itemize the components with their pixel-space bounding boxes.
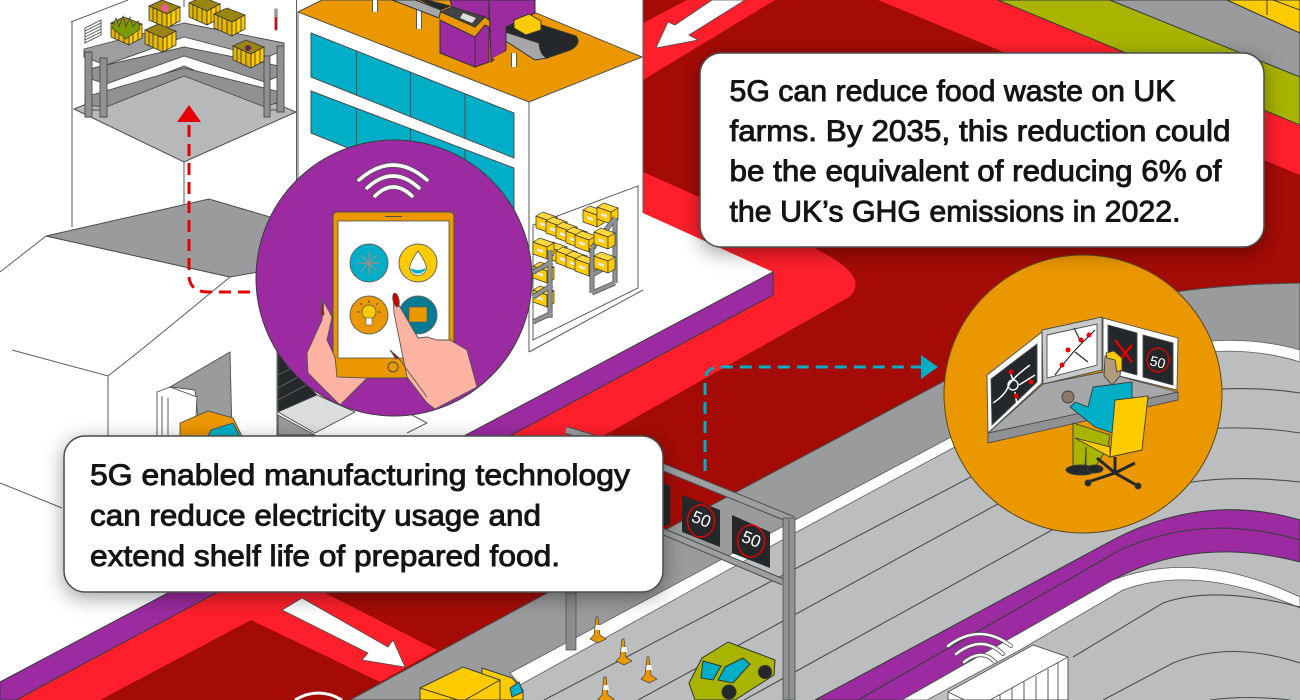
truck: white trailer with 5G signal <box>948 634 1068 700</box>
callout: farm food waste: be the equivalent of reducing 6% of <box>730 155 1222 188</box>
icon: wifi on trailer <box>948 634 1011 662</box>
windows: top row <box>311 33 514 158</box>
motorway: lower white strip <box>902 567 1300 700</box>
callout: manufacturing technology <box>64 436 663 592</box>
sign: speed limit 50 left <box>682 495 720 547</box>
road band: bright red top left with arrow <box>643 0 775 80</box>
icon: light bulb <box>350 296 388 334</box>
sign: speed limit 50 right: 50 <box>739 527 764 552</box>
callout: farm food waste: farms. By 2035, this reduction could <box>730 115 1230 148</box>
icon: parcel <box>399 296 437 334</box>
connector: red dashed arrow <box>177 105 258 292</box>
machinery: main building <box>298 0 642 158</box>
circle: orange traffic control room <box>944 255 1222 533</box>
cold room: floor <box>74 66 296 162</box>
truck: yellow lorry <box>420 667 523 700</box>
hands holding tablet <box>307 293 477 409</box>
circle: purple tablet app <box>256 140 532 416</box>
cold room: vent <box>85 20 101 43</box>
motorway: light carriageway <box>490 350 1300 700</box>
callout: manufacturing technology: extend shelf life of prepared food. <box>90 540 560 573</box>
platform: white factory ground <box>0 0 773 682</box>
motorway: white edge strip <box>510 340 1300 685</box>
sign: speed limit 50 left: 50 <box>689 507 714 532</box>
warehouse: thin building lines <box>0 0 643 508</box>
callout: farm food waste: the UK’s GHG emissions in 2022. <box>730 196 1180 228</box>
loading bay: dark conveyor ramp <box>278 353 355 435</box>
person at desk <box>1062 351 1148 489</box>
windows: second row <box>311 91 514 215</box>
gantry with speed signs <box>566 430 795 700</box>
desk <box>988 372 1178 443</box>
motorway: lower lane lines <box>1073 595 1300 700</box>
arrow: white direction bottom <box>282 598 405 667</box>
sign: speed limit 50 right <box>732 515 770 568</box>
office chair <box>1075 396 1148 489</box>
icon: snowflake <box>350 244 388 282</box>
platform: purple edge <box>0 272 773 700</box>
roof: orange <box>298 0 642 102</box>
monitors with road maps <box>987 317 1178 433</box>
storage alcove: shelving <box>533 203 618 322</box>
loading bay: door and forklift <box>157 352 242 436</box>
motorway lane lines <box>544 389 1300 700</box>
cold room: crates of produce <box>111 0 264 68</box>
car: green hatchback <box>689 642 775 700</box>
icon: water drop <box>399 244 437 282</box>
motorway: curved purple central lane <box>815 510 1300 700</box>
callout: manufacturing technology: can reduce electricity usage and <box>90 500 541 532</box>
icon: wifi signal <box>359 165 427 196</box>
connector: blue dashed arrow <box>705 355 938 471</box>
callout: farm food waste <box>700 53 1264 247</box>
cold room: thermometer <box>274 10 278 29</box>
motorway: dark hard shoulder <box>350 283 1300 700</box>
road band: bright red around factory <box>0 100 856 700</box>
farm field stripes top right <box>878 0 1300 175</box>
arrow: white direction top <box>656 0 745 48</box>
callout: farm food waste: 5G can reduce food waste on UK <box>730 75 1176 108</box>
cold room: L-shaped shelving <box>84 23 284 117</box>
wifi arc bottom left <box>295 693 342 700</box>
machinery: conveyor belt on roof <box>375 0 578 67</box>
monitors with road maps: 50 <box>1148 352 1167 372</box>
callout: manufacturing technology: 5G enabled manufacturing technology <box>90 459 630 492</box>
warehouse: dark roof opening <box>46 199 270 277</box>
tablet <box>333 212 454 378</box>
traffic cones <box>590 617 657 700</box>
